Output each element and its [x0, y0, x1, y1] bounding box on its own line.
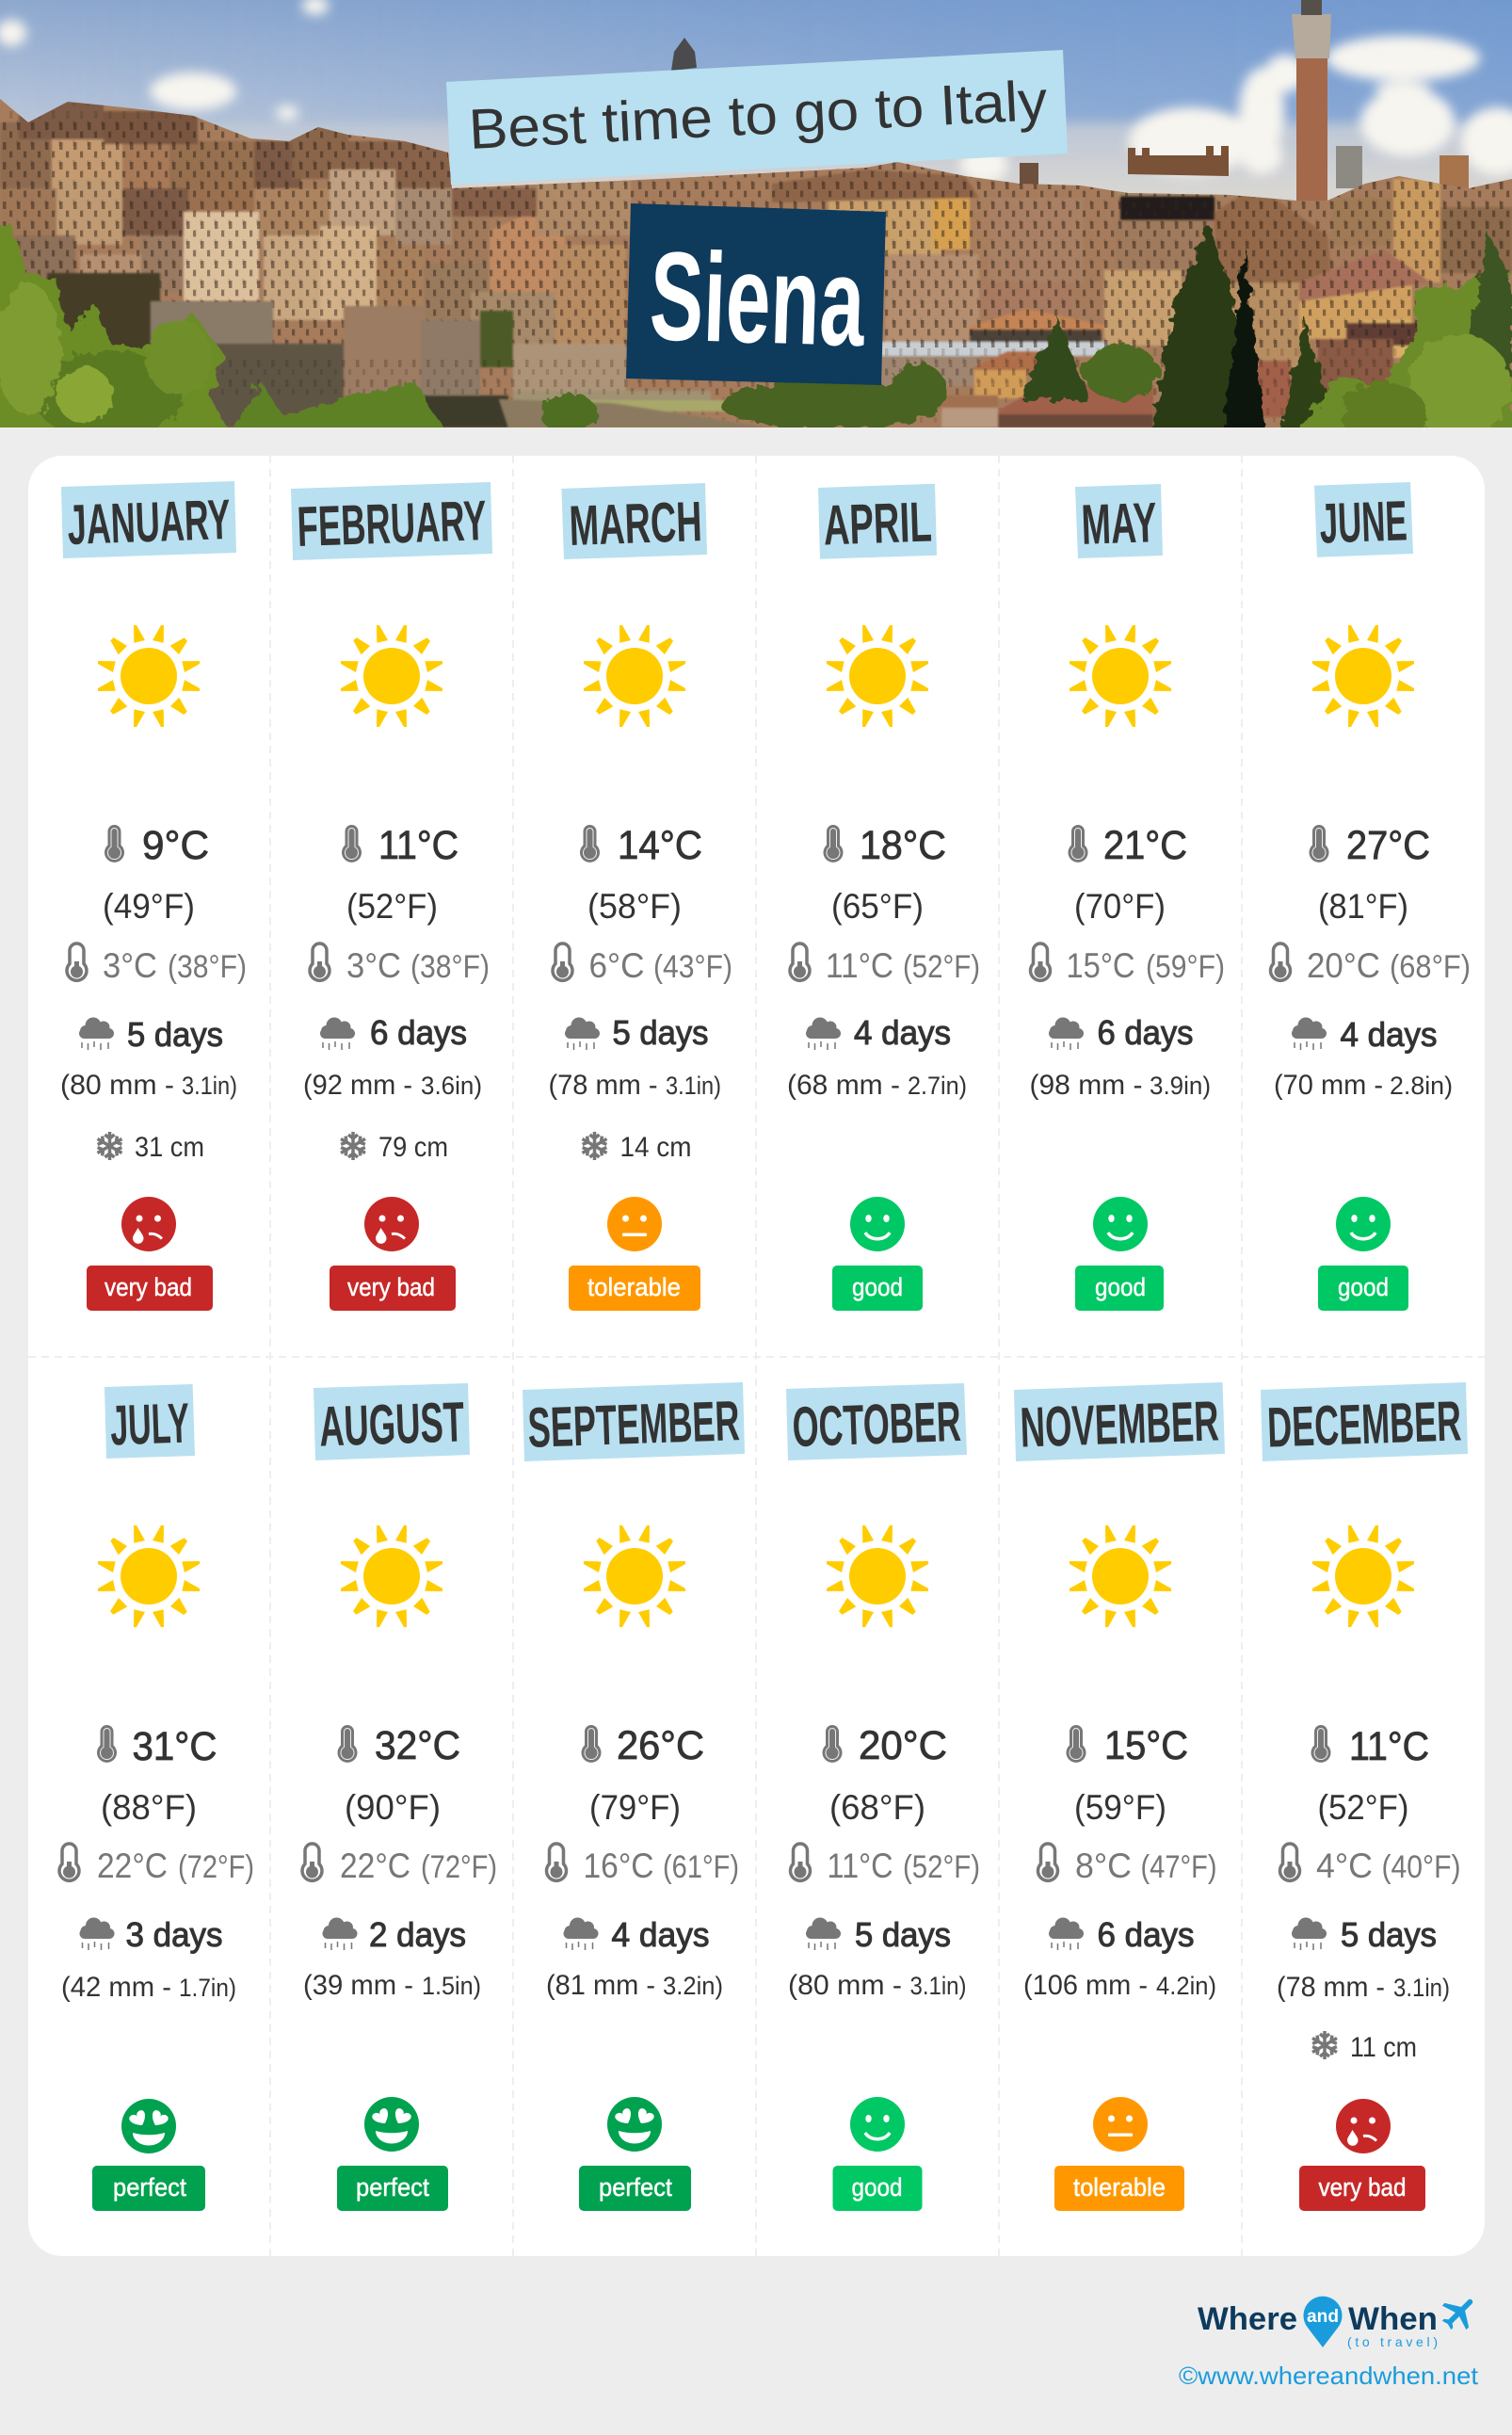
rainfall: (92 mm -: [303, 1070, 412, 1101]
low temperature: [791, 1844, 980, 1885]
heading: February: [291, 482, 492, 560]
rainfall: [787, 1013, 967, 1101]
heading: August: AUGUST: [318, 1390, 465, 1459]
panel: November: [1014, 1382, 1225, 2211]
rating: perfect: [92, 2099, 205, 2211]
high temperature: (49°F): [103, 887, 195, 926]
rainfall: 3.1in): [909, 1972, 966, 2000]
rating: very bad: [1299, 2099, 1425, 2211]
high temperature: 31°C: [132, 1724, 217, 1769]
rainfall: (42 mm -: [61, 1972, 171, 2003]
icon: sun: [1312, 625, 1414, 727]
low temperature: [1280, 1844, 1461, 1885]
heading: February: FEBRUARY: [296, 489, 488, 558]
low temperature: 11°C: [827, 1846, 893, 1885]
rainfall: 2.7in): [908, 1072, 967, 1100]
trees and cypresses: [0, 224, 1512, 447]
snowfall: [95, 1132, 204, 1163]
panel: September: [523, 1382, 745, 2211]
hero photo: Siena skyline: [0, 0, 1512, 447]
low temperature: [59, 1844, 254, 1885]
panel: December: [1261, 1382, 1468, 2211]
panel: January: [60, 481, 247, 1311]
high temperature: [1068, 823, 1187, 926]
rainfall: (78 mm -: [548, 1070, 657, 1101]
high temperature: (68°F): [829, 1788, 925, 1827]
high temperature: 18°C: [860, 823, 946, 868]
rainfall: 5 days: [855, 1915, 951, 1954]
high temperature: 26°C: [617, 1723, 704, 1768]
high temperature: [337, 1723, 460, 1827]
rainfall: [788, 1915, 966, 2001]
icon: sun: [827, 625, 928, 727]
high temperature: (90°F): [345, 1788, 441, 1827]
rating: good: good: [851, 2173, 902, 2201]
low temperature: (68°F): [1390, 949, 1471, 985]
heading: October: OCTOBER: [791, 1390, 962, 1459]
low temperature: (72°F): [421, 1849, 497, 1885]
heading: November: NOVEMBER: [1019, 1389, 1220, 1459]
rating: good: [1318, 1197, 1408, 1311]
low temperature: (52°F): [903, 949, 980, 985]
rainfall: 2.8in): [1390, 1072, 1453, 1100]
panel: February: [291, 482, 492, 1311]
high temperature: [342, 823, 458, 926]
rainfall: 3.1in): [1393, 1974, 1450, 2002]
rainfall: 4.2in): [1156, 1972, 1216, 2000]
high temperature: [1309, 823, 1430, 926]
rainfall: (106 mm -: [1023, 1970, 1148, 2001]
palace and towers: [1020, 0, 1469, 202]
rainfall: 1.5in): [422, 1972, 481, 2000]
low temperature: (59°F): [1146, 949, 1225, 985]
high temperature: 9°C: [142, 823, 209, 868]
icon: map pin: [1303, 2297, 1343, 2347]
title text: Best time to go to Italy: [467, 69, 1049, 161]
heading: June: JUNE: [1318, 489, 1408, 556]
rainfall: (80 mm -: [60, 1070, 174, 1101]
rating: very bad: very bad: [105, 1273, 192, 1301]
rating: tolerable: [569, 1197, 700, 1311]
high temperature: (88°F): [101, 1788, 197, 1827]
rating: tolerable: tolerable: [1073, 2173, 1166, 2201]
high temperature: 11°C: [1349, 1724, 1429, 1769]
heading: June: [1314, 482, 1413, 557]
snowfall: 79 cm: [378, 1132, 448, 1163]
high temperature: [103, 823, 209, 926]
snowfall: [339, 1132, 448, 1163]
rating: perfect: perfect: [599, 2173, 672, 2201]
rating: good: [832, 1197, 923, 1311]
rating: tolerable: tolerable: [587, 1273, 681, 1301]
rainfall: 6 days: [370, 1013, 467, 1052]
low temperature: (40°F): [1382, 1849, 1461, 1885]
rainfall: 4 days: [1341, 1015, 1437, 1054]
snowfall: [1311, 2031, 1417, 2063]
panel: August: [302, 1383, 497, 2211]
low temperature: 22°C: [97, 1846, 168, 1885]
snowfall: 11 cm: [1350, 2032, 1417, 2063]
rainfall: 3.1in): [182, 1072, 237, 1100]
icon: sun: [584, 625, 685, 727]
rainfall: 3.9in): [1150, 1072, 1211, 1100]
low temperature: [553, 943, 732, 985]
high temperature: (65°F): [831, 887, 924, 926]
rainfall: (70 mm -: [1274, 1070, 1383, 1101]
high temperature: (59°F): [1074, 1788, 1166, 1827]
town mosaic: [0, 94, 1512, 436]
high temperature: [823, 1723, 947, 1827]
low temperature: [1037, 1844, 1216, 1885]
low temperature: 3°C: [103, 946, 157, 985]
logo: Where and When: Where: [1198, 2301, 1297, 2337]
heading: January: [61, 481, 236, 558]
icon: sun: [827, 1525, 928, 1627]
website credit: ©www.whereandwhen.net: [1179, 2362, 1479, 2390]
rainfall: [1274, 1015, 1453, 1101]
high temperature: 27°C: [1346, 823, 1430, 868]
low temperature: (52°F): [903, 1849, 980, 1885]
rainfall: (98 mm -: [1030, 1070, 1143, 1101]
rainfall: 3.6in): [421, 1072, 482, 1100]
icon: sun: [1312, 1525, 1414, 1627]
low temperature: (72°F): [178, 1849, 254, 1885]
high temperature: (52°F): [1318, 1788, 1408, 1827]
heading: January: JANUARY: [66, 488, 232, 556]
high temperature: [1311, 1724, 1429, 1827]
rating: perfect: [337, 2097, 448, 2211]
rainfall: [61, 1915, 236, 2003]
high temperature: [1066, 1723, 1188, 1827]
panel: March: [548, 483, 732, 1311]
rainfall: [60, 1015, 237, 1101]
high temperature: [97, 1724, 217, 1827]
low temperature: [1030, 943, 1225, 985]
rating: good: good: [1095, 1273, 1146, 1301]
rainfall: [303, 1915, 481, 2001]
heading: May: [1075, 484, 1163, 558]
rainfall: 3 days: [126, 1915, 222, 1954]
cathedral spire: [671, 38, 697, 71]
high temperature: 14°C: [618, 823, 702, 868]
icon: airplane: [1435, 2288, 1484, 2337]
panel: May: [1030, 484, 1225, 1311]
heading: November: [1014, 1382, 1225, 1461]
city name: Siena: [648, 226, 868, 373]
city name banner: [626, 203, 886, 385]
logo: Where and When: [1198, 2288, 1484, 2349]
heading: September: SEPTEMBER: [526, 1389, 741, 1459]
low temperature: [790, 943, 980, 985]
rainfall: 3.2in): [663, 1972, 723, 2000]
rainfall: 4 days: [854, 1013, 951, 1052]
panel: July: [59, 1384, 254, 2211]
snowfall: 31 cm: [135, 1132, 204, 1163]
icon: sun: [341, 625, 442, 727]
high temperature: 20°C: [859, 1723, 947, 1768]
rating: very bad: [330, 1197, 456, 1311]
rating: good: [832, 2097, 923, 2211]
low temperature: [310, 943, 490, 985]
high temperature: [823, 823, 946, 926]
high temperature: (52°F): [346, 887, 438, 926]
high temperature: [580, 823, 702, 926]
rating: perfect: perfect: [113, 2173, 186, 2201]
low temperature: 22°C: [340, 1846, 410, 1885]
heading: September: [523, 1382, 745, 1461]
panel: October: [786, 1383, 980, 2211]
rating: good: good: [852, 1273, 903, 1301]
icon: sun: [1070, 625, 1171, 727]
heading: March: MARCH: [568, 490, 703, 557]
icon: sun: [98, 1525, 200, 1627]
rating: very bad: very bad: [347, 1273, 435, 1301]
rainfall: [548, 1013, 721, 1101]
snowfall: [580, 1132, 691, 1163]
low temperature: 3°C: [346, 946, 401, 985]
logo: Where and When: and: [1307, 2307, 1339, 2327]
rating: very bad: [87, 1197, 213, 1311]
low temperature: 8°C: [1075, 1846, 1132, 1885]
high temperature: 21°C: [1103, 823, 1187, 868]
rainfall: 6 days: [1098, 1013, 1194, 1052]
rainfall: [303, 1013, 482, 1101]
rainfall: (78 mm -: [1277, 1972, 1385, 2003]
rating: very bad: very bad: [1318, 2173, 1407, 2201]
high temperature: (81°F): [1318, 887, 1408, 926]
rating: perfect: [579, 2097, 691, 2211]
logo: Where and When: (to travel): [1347, 2334, 1438, 2349]
high temperature: 11°C: [378, 823, 458, 868]
main white panel: [28, 456, 1485, 2256]
rainfall: (39 mm -: [303, 1970, 413, 2001]
title banner: [446, 50, 1068, 185]
high temperature: 32°C: [375, 1723, 460, 1768]
heading: April: [818, 484, 937, 559]
low temperature: (38°F): [410, 949, 490, 985]
low temperature: 4°C: [1316, 1846, 1373, 1885]
icon: sun: [98, 625, 200, 727]
low temperature: 16°C: [584, 1846, 653, 1885]
low temperature: 6°C: [589, 946, 644, 985]
rainfall: [1277, 1915, 1450, 2003]
high temperature: (79°F): [589, 1788, 681, 1827]
heading: August: [314, 1383, 470, 1460]
icon: sun: [584, 1525, 685, 1627]
heading: July: [105, 1384, 195, 1459]
low temperature: (43°F): [653, 949, 732, 985]
rainfall: (81 mm -: [546, 1970, 655, 2001]
rainfall: 2 days: [369, 1915, 466, 1954]
high temperature: (58°F): [587, 887, 682, 926]
heading: March: [561, 483, 707, 559]
icon: sun: [1070, 1525, 1171, 1627]
rainfall: [546, 1915, 723, 2001]
rating: perfect: perfect: [356, 2173, 429, 2201]
low temperature: 15°C: [1066, 946, 1135, 985]
rainfall: 6 days: [1098, 1915, 1194, 1954]
low temperature: [67, 943, 247, 985]
rainfall: (80 mm -: [788, 1970, 902, 2001]
low temperature: [1271, 943, 1471, 985]
low temperature: (47°F): [1141, 1849, 1216, 1885]
rating: tolerable: [1054, 2097, 1184, 2211]
low temperature: (61°F): [663, 1849, 739, 1885]
heading: July: JULY: [109, 1392, 190, 1457]
low temperature: 11°C: [826, 946, 893, 985]
rating: good: good: [1338, 1273, 1389, 1301]
logo: Where and When: When: [1348, 2301, 1438, 2337]
snowfall: 14 cm: [619, 1132, 691, 1163]
rainfall: [1030, 1013, 1211, 1101]
high temperature: 15°C: [1104, 1723, 1188, 1768]
rainfall: 5 days: [612, 1013, 708, 1052]
rainfall: 3.1in): [666, 1072, 721, 1100]
high temperature: (70°F): [1074, 887, 1166, 926]
low temperature: [302, 1844, 497, 1885]
high temperature: [582, 1723, 704, 1827]
rainfall: 4 days: [612, 1915, 710, 1954]
heading: October: [786, 1383, 967, 1460]
low temperature: (38°F): [168, 949, 247, 985]
rainfall: 1.7in): [179, 1974, 236, 2002]
rainfall: 5 days: [127, 1015, 223, 1054]
heading: April: APRIL: [822, 491, 933, 556]
rainfall: (68 mm -: [787, 1070, 900, 1101]
rainfall: 5 days: [1341, 1915, 1437, 1954]
rating: good: [1075, 1197, 1164, 1311]
low temperature: [546, 1844, 739, 1885]
panel: June: [1271, 482, 1471, 1311]
heading: May: MAY: [1080, 491, 1158, 556]
panel: April: [787, 484, 980, 1311]
icon: sun: [341, 1525, 442, 1627]
low temperature: 20°C: [1307, 946, 1380, 985]
rainfall: [1023, 1915, 1216, 2001]
